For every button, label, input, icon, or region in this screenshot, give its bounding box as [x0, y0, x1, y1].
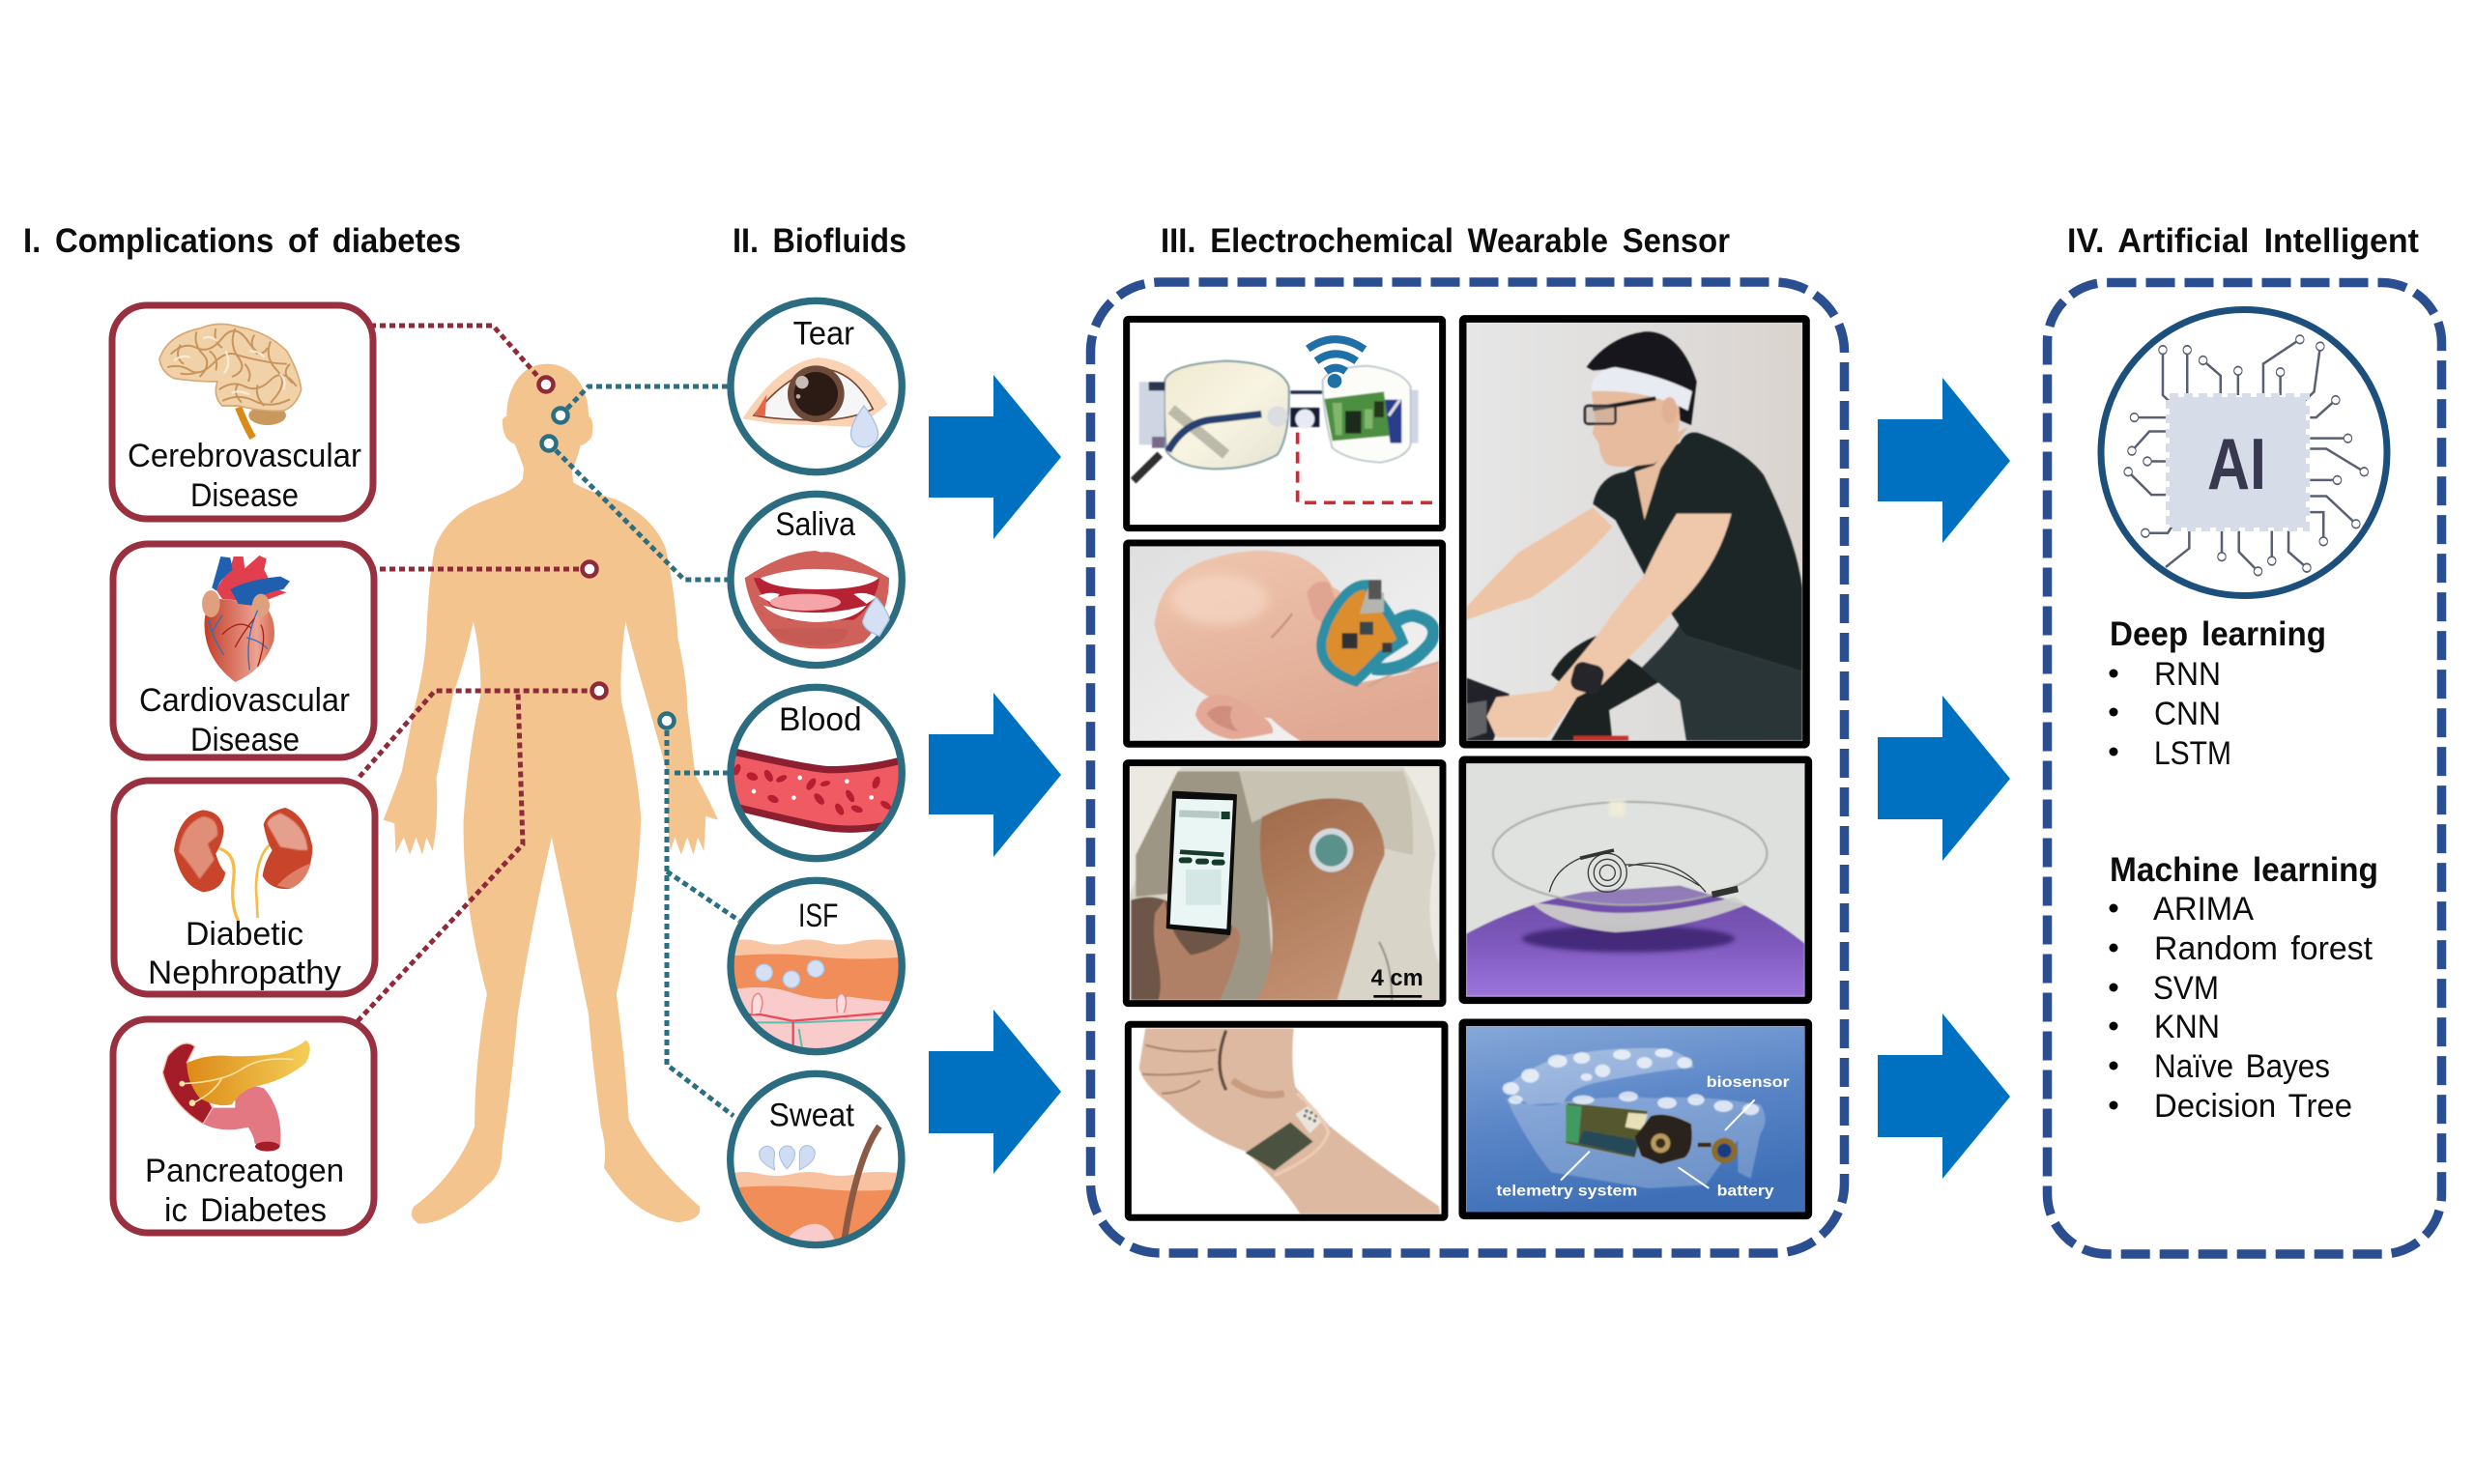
label: Saliva — [775, 506, 855, 543]
label: ISF — [798, 898, 838, 934]
panel: cardiovascular disease — [113, 544, 374, 758]
list item: CNN: CNN — [2154, 696, 2221, 732]
panel: cerebrovascular disease — [112, 305, 373, 519]
panel: artificial intelligent dashed frame — [2047, 282, 2441, 1254]
icon: wifi — [1308, 339, 1365, 371]
biofluid: saliva — [731, 494, 902, 666]
heading: electrochemical wearable sensor: III. Electrochemical Wearable Sensor — [1161, 222, 1730, 260]
photo: smart glasses — [1127, 319, 1443, 528]
list item: KNN: KNN — [2154, 1009, 2220, 1045]
list item: LSTM — [2109, 735, 2231, 772]
icon: skin layers with fluid — [734, 939, 899, 1048]
label line two: Nephropathy — [148, 955, 341, 991]
icon: blood vessel — [728, 747, 908, 829]
list item: Decision Tree: Decision Tree — [2154, 1088, 2352, 1125]
list item: KNN — [2109, 1009, 2220, 1045]
heading: complications of diabetes: I. Complications of diabetes — [23, 222, 461, 260]
connector nodes: complications — [539, 377, 607, 698]
icon: skin with hair and sweat drops — [734, 1125, 897, 1241]
human body silhouette — [384, 364, 718, 1224]
photo: man on exercise bike — [1463, 319, 1806, 745]
label line two: Disease — [190, 477, 299, 514]
biofluid: blood — [728, 687, 908, 859]
list item: Random forest: Random forest — [2154, 930, 2373, 967]
label: Blood — [779, 701, 862, 738]
list item: CNN — [2109, 696, 2221, 732]
panel: electrochemical wearable sensor dashed frame — [1090, 282, 1844, 1253]
icon: eye — [742, 357, 887, 447]
list item: ARIMA — [2109, 891, 2254, 928]
text block: deep learning — [2109, 615, 2326, 772]
text block: deep learning: Deep learning — [2110, 615, 2326, 653]
ring — [731, 687, 902, 859]
label: biosensor: biosensor — [1707, 1074, 1790, 1091]
arrow: bottom left — [929, 1010, 1061, 1174]
list item: RNN — [2109, 656, 2221, 693]
arrow: middle left — [929, 693, 1061, 857]
ring — [731, 880, 902, 1052]
photo: mouthguard biosensor — [1462, 1022, 1808, 1215]
photo: wrist band sensor — [1128, 1024, 1445, 1217]
heading: biofluids: II. Biofluids — [733, 222, 906, 260]
label: Cardiovascular — [139, 682, 350, 719]
photo: smart contact lens — [1462, 759, 1808, 1000]
sweat droplets — [760, 1146, 815, 1170]
label: Pancreatogen — [145, 1153, 344, 1189]
list item: LSTM: LSTM — [2154, 735, 2231, 772]
scale label: 4 cm — [1371, 965, 1424, 991]
list item: RNN: RNN — [2154, 656, 2221, 693]
label line two: Disease — [190, 722, 300, 758]
list item: SVM — [2109, 970, 2219, 1007]
label: Diabetic — [186, 916, 303, 953]
panel: pancreatogenic diabetes — [113, 1019, 374, 1233]
photo: infant mannequin with pacifier sensor — [1127, 543, 1443, 744]
circuit traces — [2124, 335, 2369, 576]
label: battery: battery — [1717, 1183, 1774, 1199]
icon: pancreas — [162, 1041, 310, 1152]
icon: mouth — [745, 551, 889, 649]
list item: SVM: SVM — [2153, 970, 2219, 1007]
arrow: bottom right — [1878, 1013, 2010, 1179]
infographic canvas — [25, 228, 2447, 1259]
connectors: biofluids to body — [549, 386, 739, 1116]
biofluid: sweat — [728, 1073, 908, 1248]
label: Cerebrovascular — [128, 438, 361, 474]
photo: arm patch with smartphone — [1126, 763, 1443, 1004]
icon: AI chip in circle — [2101, 309, 2387, 595]
biofluid: tear — [731, 300, 902, 472]
panel: diabetic nephropathy — [114, 781, 375, 994]
text block: machine learning: Machine learning — [2110, 851, 2378, 889]
chip — [2170, 397, 2306, 528]
icon: heart — [202, 556, 290, 682]
label: telemetry system: telemetry system — [1496, 1183, 1637, 1199]
arrow: top right — [1878, 378, 2010, 543]
heading: artificial intelligent: IV. Artificial Intelligent — [2067, 222, 2419, 260]
biofluid: interstitial fluid — [728, 880, 908, 1055]
list item: Naive Bayes: Naïve Bayes — [2154, 1048, 2330, 1085]
icon: kidneys — [174, 808, 312, 921]
chip label: AI — [2207, 423, 2266, 504]
arrow: middle right — [1878, 696, 2010, 861]
ring — [731, 1073, 902, 1245]
connectors: complications to body — [358, 326, 599, 1021]
icon: brain — [159, 324, 302, 438]
list item: ARIMA: ARIMA — [2153, 891, 2254, 928]
label: Tear — [793, 316, 854, 353]
text block: machine learning — [2109, 851, 2378, 1125]
connector nodes: biofluids — [541, 408, 675, 728]
arrow: top left — [929, 375, 1061, 539]
label line two: ic Diabetes — [164, 1192, 327, 1229]
label: Sweat — [769, 1098, 855, 1134]
